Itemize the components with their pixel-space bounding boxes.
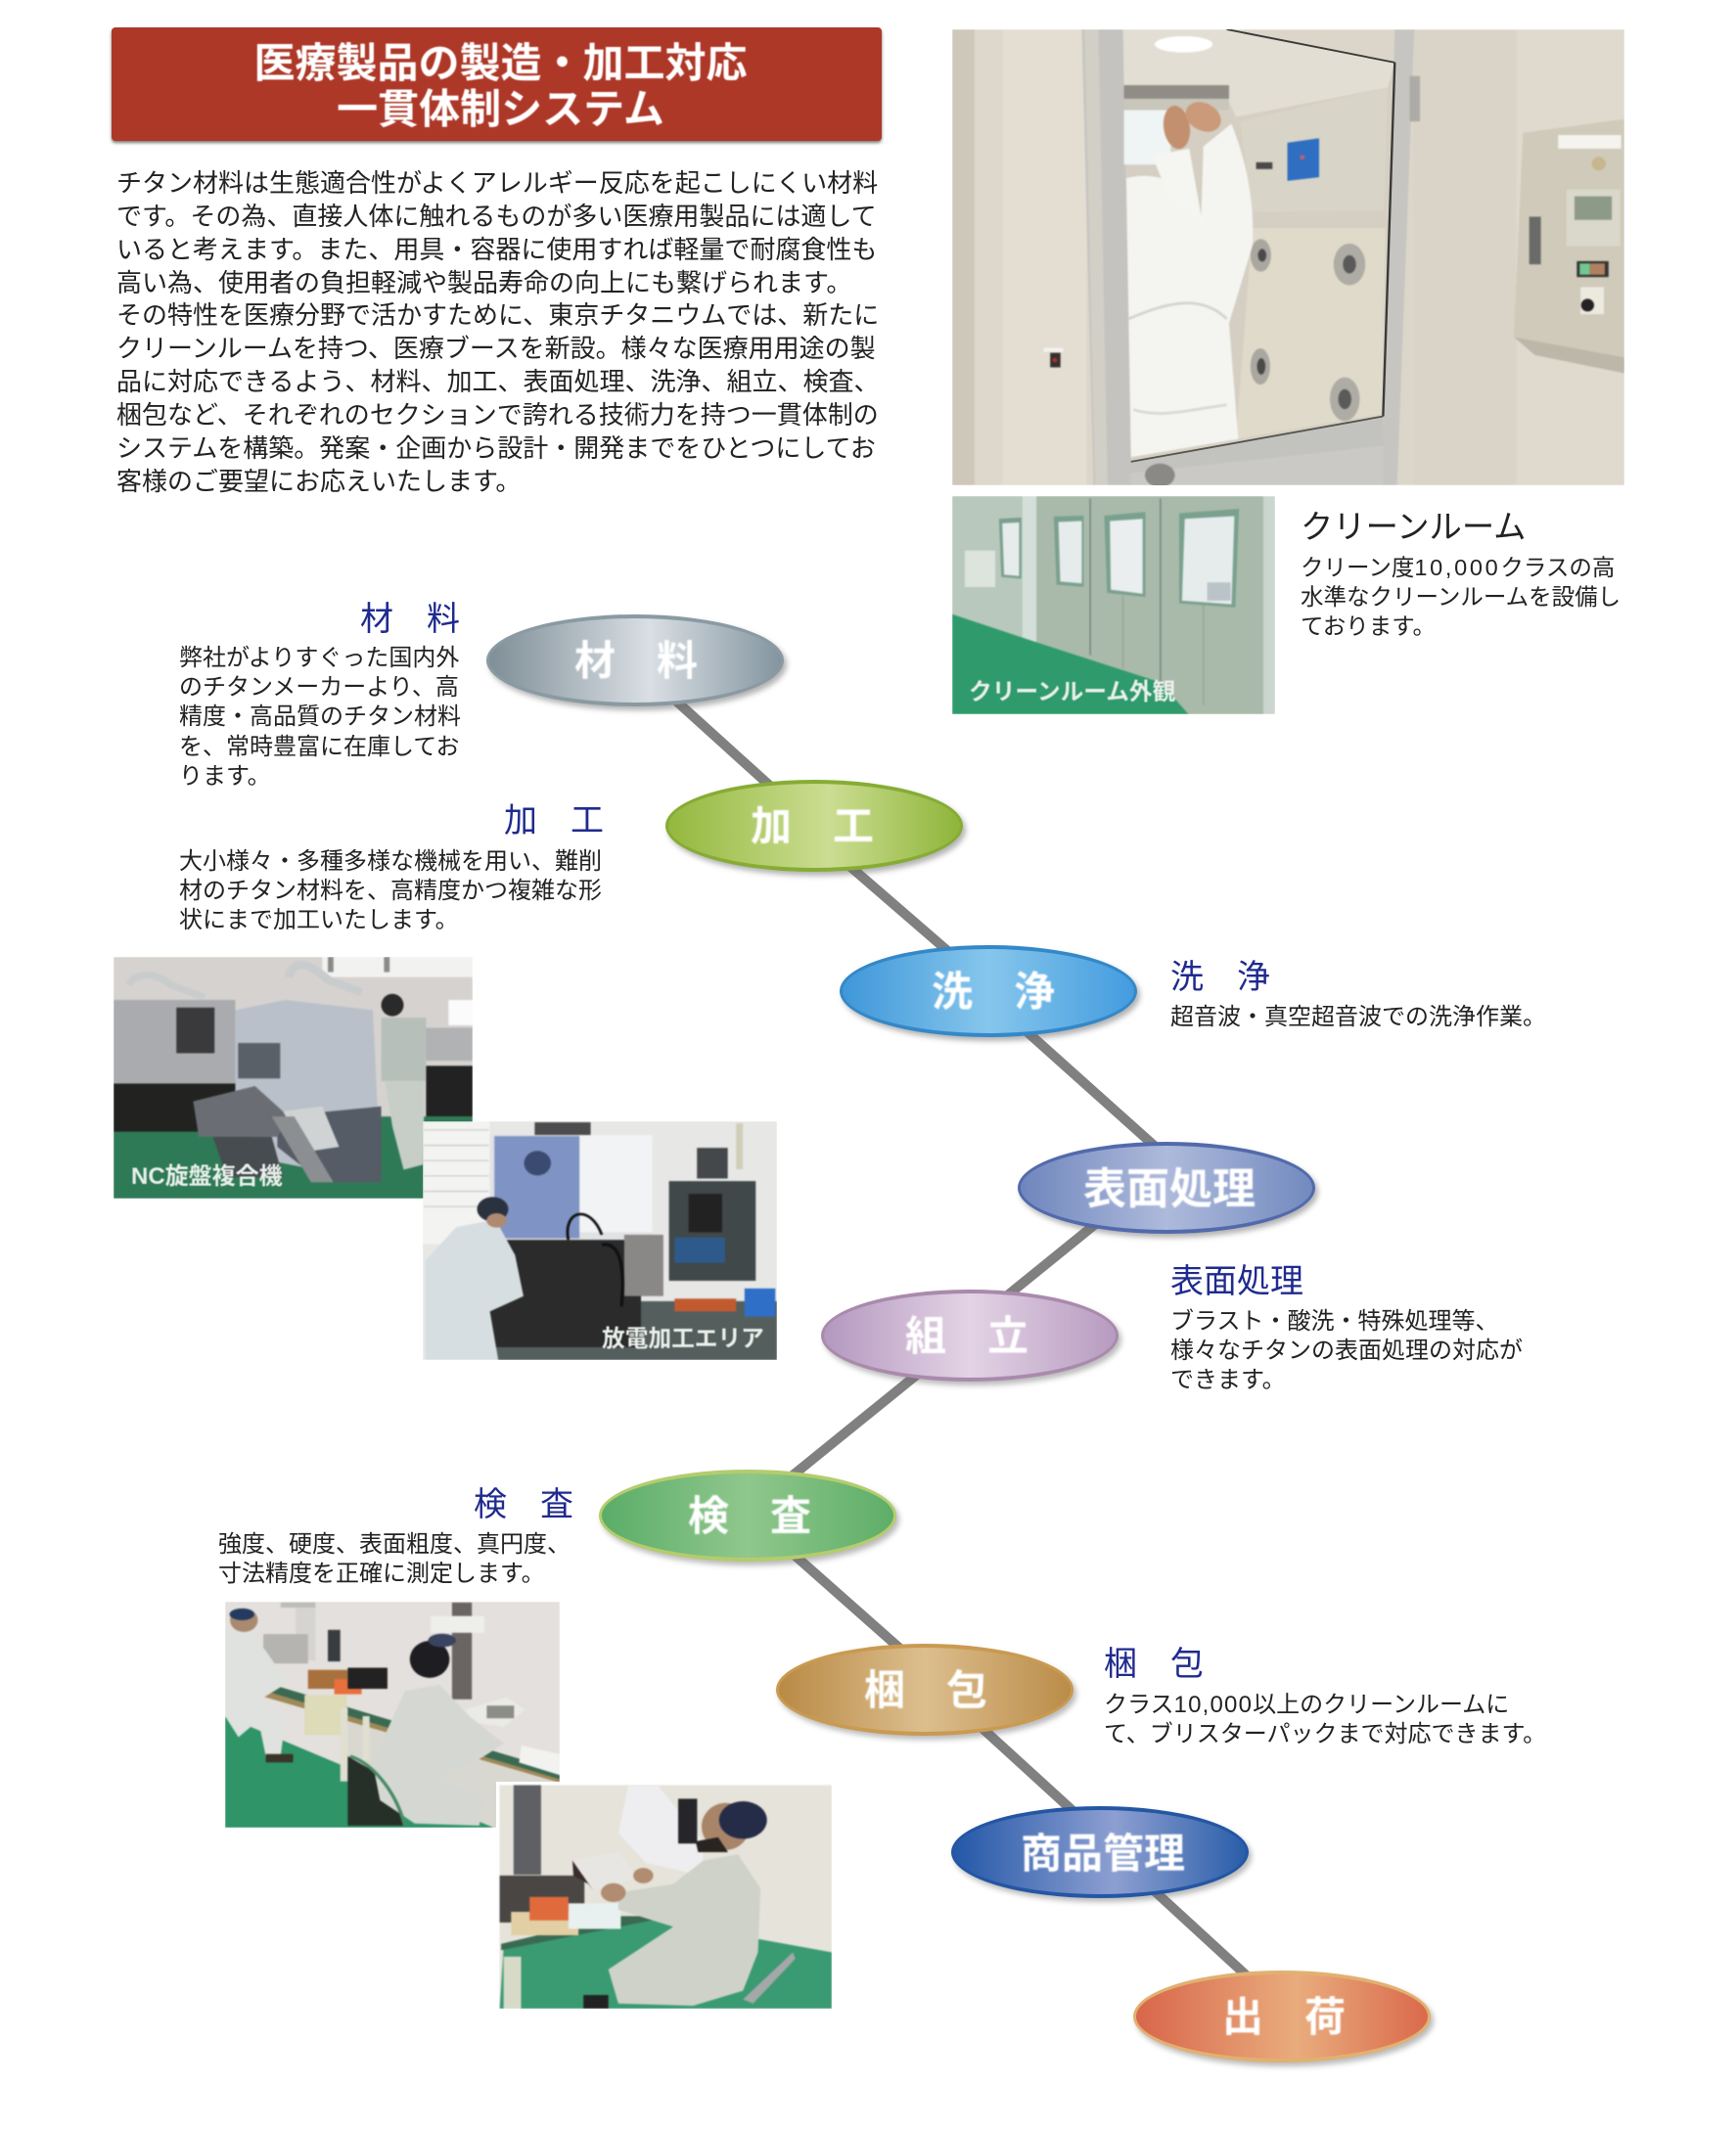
text: machining: 状にまで加工いたします。 bbox=[179, 907, 459, 933]
text: inspection: 強度、硬度、表面粗度、真円度、 bbox=[218, 1531, 571, 1558]
node: 表面処理 bbox=[1018, 1142, 1318, 1238]
node: 組立: 組 立 bbox=[905, 1313, 1028, 1359]
node: 表面処理: 表面処理 bbox=[1083, 1165, 1256, 1213]
text: clean room description bbox=[1301, 555, 1621, 639]
text: machining bbox=[179, 848, 602, 933]
intro text block: いると考えます。また、用具・容器に使用すれば軽量で耐腐食性も bbox=[116, 235, 877, 264]
node: 検査: 検 査 bbox=[688, 1493, 811, 1539]
photo: EDM area bbox=[423, 1121, 777, 1360]
node: 検査 bbox=[599, 1470, 899, 1565]
node: 商品管理 bbox=[951, 1806, 1252, 1902]
node: 加工 bbox=[665, 780, 966, 876]
heading: cleaning: 洗 浄 bbox=[1170, 959, 1270, 996]
text: packaging: クラス10,000以上のクリーンルームに bbox=[1104, 1692, 1509, 1718]
heading: inspection: 検 査 bbox=[474, 1486, 573, 1523]
text: clean room description: 水準なクリーンルームを設備し bbox=[1301, 584, 1621, 610]
node: 梱包 bbox=[776, 1644, 1076, 1740]
text: material: 精度・高品質のチタン材料 bbox=[179, 703, 461, 730]
caption: clean room exterior: クリーンルーム外観 bbox=[969, 680, 1175, 705]
text: inspection: 寸法精度を正確に測定します。 bbox=[218, 1561, 545, 1587]
intro text block: その特性を医療分野で活かすために、東京チタニウムでは、新たに bbox=[116, 300, 879, 330]
connector lines bbox=[670, 696, 1251, 1979]
text: surface treatment: ブラスト・酸洗・特殊処理等、 bbox=[1170, 1308, 1499, 1335]
heading: machining: 加 工 bbox=[504, 802, 604, 839]
node: 加工: 加 工 bbox=[751, 803, 874, 849]
heading: material: 材 料 bbox=[360, 601, 460, 638]
photo: inspection close-up bbox=[496, 1782, 832, 2009]
text: clean room description: ております。 bbox=[1301, 613, 1436, 639]
heading: packaging: 梱 包 bbox=[1104, 1646, 1204, 1683]
node: 材料: 材 料 bbox=[574, 638, 698, 684]
intro text block: 品に対応できるよう、材料、加工、表面処理、洗浄、組立、検査、 bbox=[116, 367, 879, 396]
photo: inspection desk bbox=[225, 1602, 560, 1828]
text: packaging bbox=[1104, 1692, 1546, 1747]
intro text block: クリーンルームを持つ、医療ブースを新設。様々な医療用用途の製 bbox=[116, 334, 876, 363]
node: 組立 bbox=[821, 1290, 1121, 1385]
text: inspection bbox=[218, 1531, 571, 1587]
intro text block: 客様のご要望にお応えいたします。 bbox=[116, 467, 521, 496]
text: material: ります。 bbox=[179, 763, 271, 790]
intro text block bbox=[116, 168, 879, 496]
node: 出荷: 出 荷 bbox=[1222, 1994, 1346, 2040]
text: material: のチタンメーカーより、高 bbox=[179, 674, 459, 701]
heading: surface treatment: 表面処理 bbox=[1170, 1263, 1303, 1300]
text: machining: 大小様々・多種多様な機械を用い、難削 bbox=[179, 848, 602, 875]
intro text block: 高い為、使用者の負担軽減や製品寿命の向上にも繋げられます。 bbox=[116, 268, 851, 297]
node: 梱包: 梱 包 bbox=[864, 1667, 987, 1713]
photo: NC lathe bbox=[114, 957, 473, 1199]
node: 洗浄 bbox=[840, 945, 1140, 1041]
text: surface treatment bbox=[1170, 1308, 1523, 1393]
photo: clean room exterior bbox=[952, 496, 1275, 714]
caption: EDM area: 放電加工エリア bbox=[602, 1327, 764, 1352]
node: 洗浄: 洗 浄 bbox=[932, 969, 1055, 1015]
caption: NC lathe: NC旋盤複合機 bbox=[131, 1163, 283, 1190]
photo: clean room air shower bbox=[952, 29, 1624, 485]
node: 商品管理: 商品管理 bbox=[1021, 1831, 1185, 1877]
text: clean room description: クリーン度10,000クラスの高 bbox=[1301, 555, 1615, 580]
node: 出荷 bbox=[1133, 1971, 1434, 2066]
title banner: 一貫体制システム bbox=[337, 86, 664, 132]
title banner: 医療製品の製造・加工対応 bbox=[253, 40, 748, 86]
intro text block: です。その為、直接人体に触れるものが多い医療用製品には適して bbox=[116, 202, 877, 231]
intro text block: 梱包など、それぞれのセクションで誇れる技術力を持つ一貫体制の bbox=[116, 400, 879, 430]
text: cleaning: 超音波・真空超音波での洗浄作業。 bbox=[1170, 1004, 1546, 1030]
text: surface treatment: 様々なチタンの表面処理の対応が bbox=[1170, 1338, 1523, 1364]
text: packaging: て、ブリスターパックまで対応できます。 bbox=[1104, 1721, 1546, 1747]
text: surface treatment: できます。 bbox=[1170, 1367, 1286, 1393]
text: material: を、常時豊富に在庫してお bbox=[179, 734, 460, 760]
heading: clean room: クリーンルーム bbox=[1301, 510, 1526, 546]
text: material bbox=[179, 645, 461, 790]
title banner bbox=[112, 27, 882, 141]
intro text block: チタン材料は生態適合性がよくアレルギー反応を起こしにくい材料 bbox=[116, 168, 878, 198]
intro text block: システムを構築。発案・企画から設計・開発までをひとつにしてお bbox=[116, 433, 876, 463]
text: material: 弊社がよりすぐった国内外 bbox=[179, 645, 459, 671]
text: machining: 材のチタン材料を、高精度かつ複雑な形 bbox=[179, 878, 602, 904]
node: 材料 bbox=[486, 614, 787, 710]
